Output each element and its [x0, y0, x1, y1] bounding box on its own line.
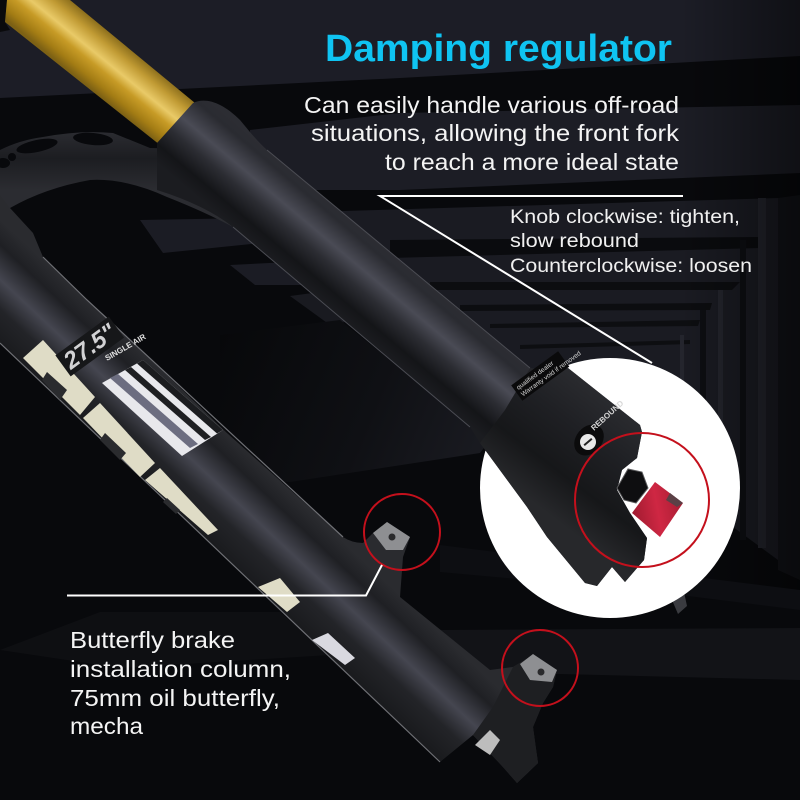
leader line: damping regulator — [380, 196, 683, 363]
decal: stripe cut-outs — [42, 372, 180, 514]
title: Damping regulator — [325, 28, 672, 70]
text block: knob instructions: Counterclockwise: loosen — [510, 255, 752, 277]
text block: main description: situations, allowing the front fork — [311, 120, 680, 146]
decal: specification label — [102, 360, 223, 456]
gold stanchion tube — [0, 0, 195, 145]
lock nut — [617, 469, 648, 503]
fork crown arch — [0, 131, 260, 230]
icon: lower brake post — [520, 654, 557, 682]
lower fork leg — [0, 195, 557, 783]
text block: main description — [304, 92, 680, 175]
decal: leg graphic stripes — [23, 340, 355, 665]
callout circle: damping knob — [575, 433, 709, 567]
icon: axle bolt — [475, 730, 500, 755]
label: rebound dial — [568, 399, 626, 461]
panel: white magnifier circle — [480, 358, 740, 618]
text block: butterfly brake — [70, 627, 291, 739]
text block: knob instructions — [510, 206, 752, 277]
text block: butterfly brake: Butterfly brake — [70, 627, 235, 653]
text block: main description: to reach a more ideal state — [385, 149, 679, 175]
text block: knob instructions: Knob clockwise: tighten, — [510, 206, 740, 228]
decal: 27.5 logo: 27.5" — [58, 318, 122, 375]
red adjustment knob — [617, 469, 683, 537]
text block: butterfly brake: mecha — [70, 713, 143, 739]
leader line: brake column — [67, 565, 382, 596]
sticker: warranty: qualified dealer — [515, 360, 556, 392]
lower lug shade — [473, 655, 557, 783]
sticker: warranty: Warranty void if removed — [520, 350, 583, 398]
knurled red cap — [632, 482, 683, 537]
label: rebound dial: REBOUND — [589, 399, 626, 432]
icon: upper brake post — [373, 522, 410, 550]
callout circle: lower brake post — [502, 630, 578, 706]
icon: crown holes — [0, 131, 113, 168]
text block: butterfly brake: installation column, — [70, 656, 291, 682]
callout circle: upper brake post — [364, 494, 440, 570]
text block: main description: Can easily handle various off-road — [304, 92, 679, 118]
text block: butterfly brake: 75mm oil butterfly, — [70, 685, 280, 711]
decal: single air text: SINGLE AIR — [104, 332, 148, 363]
text block: knob instructions: slow rebound — [510, 230, 639, 252]
sticker: warranty — [511, 341, 583, 401]
upper fork leg with damping nose — [157, 101, 647, 586]
